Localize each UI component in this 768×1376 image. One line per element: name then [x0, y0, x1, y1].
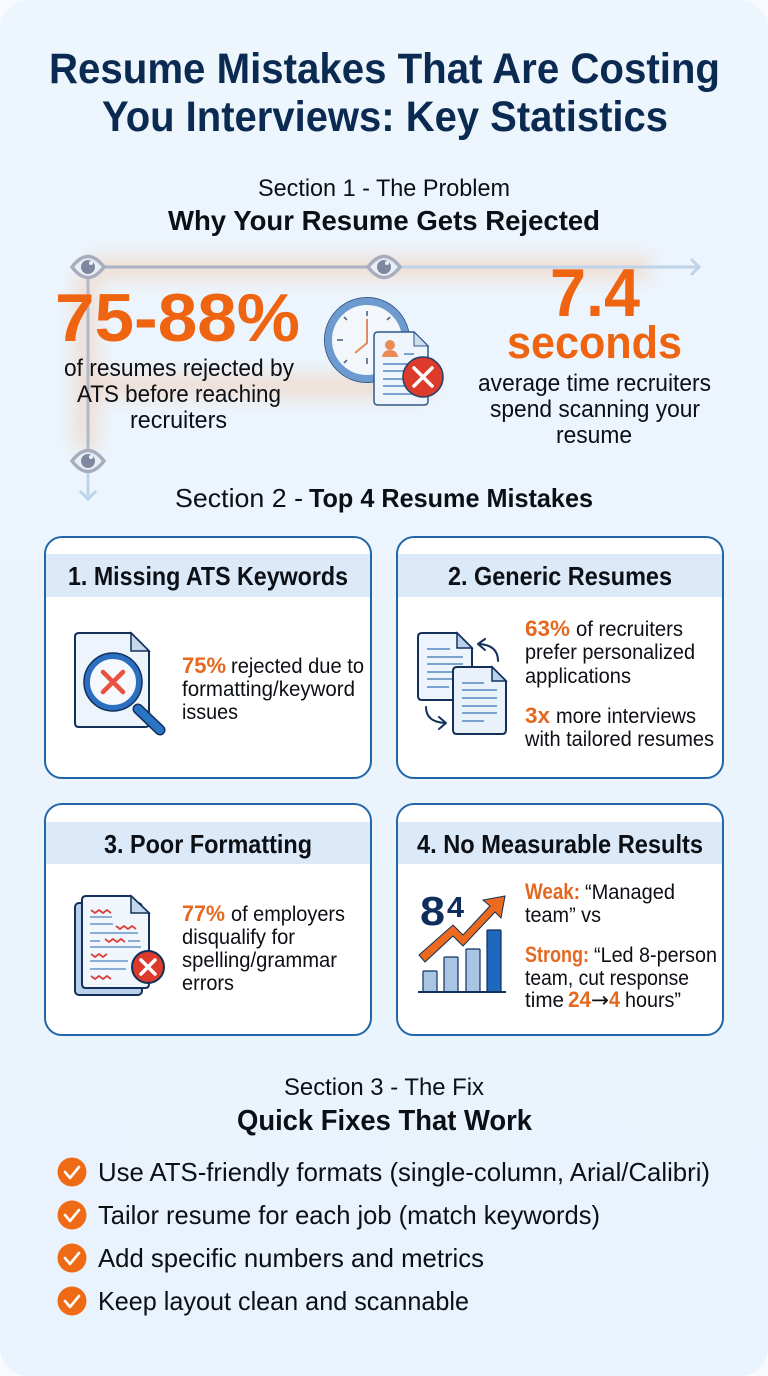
fix 4: Keep layout clean and scannable: [98, 1286, 469, 1316]
stat: 75-88% rejected: [55, 280, 300, 434]
stat: 7.4 seconds: seconds: [507, 317, 682, 368]
text: weak vs strong example: team, cut response: [525, 967, 689, 990]
heading: card 4: 4. No Measurable Results: [417, 829, 703, 859]
panel: 1. missing ATS keywords: [45, 537, 371, 778]
text: weak vs strong example: →: [591, 988, 609, 1012]
text: card 3 stat: errors: [182, 972, 234, 995]
section 1 heading: Why Your Resume Gets Rejected: [168, 205, 600, 236]
title: [49, 45, 720, 141]
text: card 3 stat: 77%: [182, 901, 225, 926]
text: card 3 stat: spelling/grammar: [182, 949, 337, 972]
section 1 heading: [168, 175, 600, 236]
stat: 75-88% rejected: ATS before reaching: [77, 381, 281, 408]
heading: card 2: 2. Generic Resumes: [448, 561, 672, 591]
eye-tracking scan path: [72, 256, 699, 499]
heading: card 1: 1. Missing ATS Keywords: [68, 561, 348, 591]
stat: 7.4 seconds: resume: [556, 422, 632, 449]
text: card 2 stats: of recruiters: [576, 618, 683, 641]
text: weak vs strong example: Strong:: [525, 942, 589, 967]
section 3 heading: Section 3 - The Fix: [284, 1074, 484, 1101]
text: card 1 stat: 75%: [182, 653, 226, 678]
text: card 3 stat: of employers: [231, 903, 345, 926]
icon: rising chart with 8 and 4: [418, 888, 506, 992]
panel: 2. generic resumes: [397, 537, 723, 778]
text: card 1 stat: formatting/keyword: [182, 678, 355, 701]
title: Resume Mistakes That Are Costing: [49, 45, 720, 93]
panel: 4. no measurable results: [397, 804, 723, 1035]
text: card 1 stat: issues: [182, 701, 238, 724]
stat: 75-88% rejected: 75-88%: [55, 280, 300, 356]
text: weak vs strong example: “Led 8-person: [594, 944, 717, 967]
section 2 heading: Top 4 Resume Mistakes: [309, 483, 593, 513]
icon: magnifier over document: [75, 633, 160, 730]
section 3 heading: Quick Fixes That Work: [237, 1105, 533, 1137]
icon: rising chart with 8 and 4: 8: [420, 888, 445, 934]
text: card 3 stat: disqualify for: [182, 926, 295, 949]
text: weak vs strong example: time: [525, 989, 564, 1012]
icon: swapped documents: [418, 633, 506, 734]
text: card 2 stats: 3x: [525, 703, 551, 728]
icon: clock and rejected resume: [324, 298, 443, 405]
stat: 7.4 seconds: 7.4: [550, 255, 640, 331]
text: weak vs strong example: Weak:: [525, 879, 580, 904]
text: card 1 stat: rejected due to: [231, 655, 364, 678]
icon: rising chart with 8 and 4: 4: [447, 892, 464, 924]
checklist: quick fixes: [58, 1157, 710, 1316]
text: card 2 stats: prefer personalized: [525, 641, 695, 664]
section 2 heading: Section 2 -: [175, 483, 303, 513]
panel: 3. poor formatting: [45, 804, 371, 1035]
fix 3: Add specific numbers and metrics: [98, 1243, 484, 1273]
fix 2: Tailor resume for each job (match keywords): [98, 1200, 600, 1230]
text: card 2 stats: with tailored resumes: [524, 728, 714, 751]
stat: 75-88% rejected: of resumes rejected by: [64, 355, 294, 382]
stat: 7.4 seconds: average time recruiters: [478, 370, 711, 397]
stat: 7.4 seconds: [478, 255, 711, 449]
heading: card 3: 3. Poor Formatting: [104, 829, 312, 859]
section 1 heading: Section 1 - The Problem: [258, 175, 510, 202]
text: weak vs strong example: team” vs: [525, 904, 601, 927]
text: weak vs strong example: “Managed: [585, 881, 675, 904]
text: card 2 stats: 63%: [525, 616, 570, 641]
text: card 2 stats: applications: [525, 665, 631, 688]
fix 1: Use ATS-friendly formats (single-column, Arial/Calibri): [98, 1157, 710, 1187]
text: card 2 stats: more interviews: [556, 705, 696, 728]
text: weak vs strong example: hours”: [625, 989, 681, 1012]
text: weak vs strong example: 24: [568, 987, 592, 1012]
stat: 75-88% rejected: recruiters: [130, 407, 227, 434]
section 3 heading: [237, 1074, 533, 1137]
stat: 7.4 seconds: spend scanning your: [490, 396, 700, 423]
icon: document with errors: [75, 896, 164, 995]
text: weak vs strong example: 4: [609, 987, 621, 1012]
title: You Interviews: Key Statistics: [102, 93, 668, 141]
